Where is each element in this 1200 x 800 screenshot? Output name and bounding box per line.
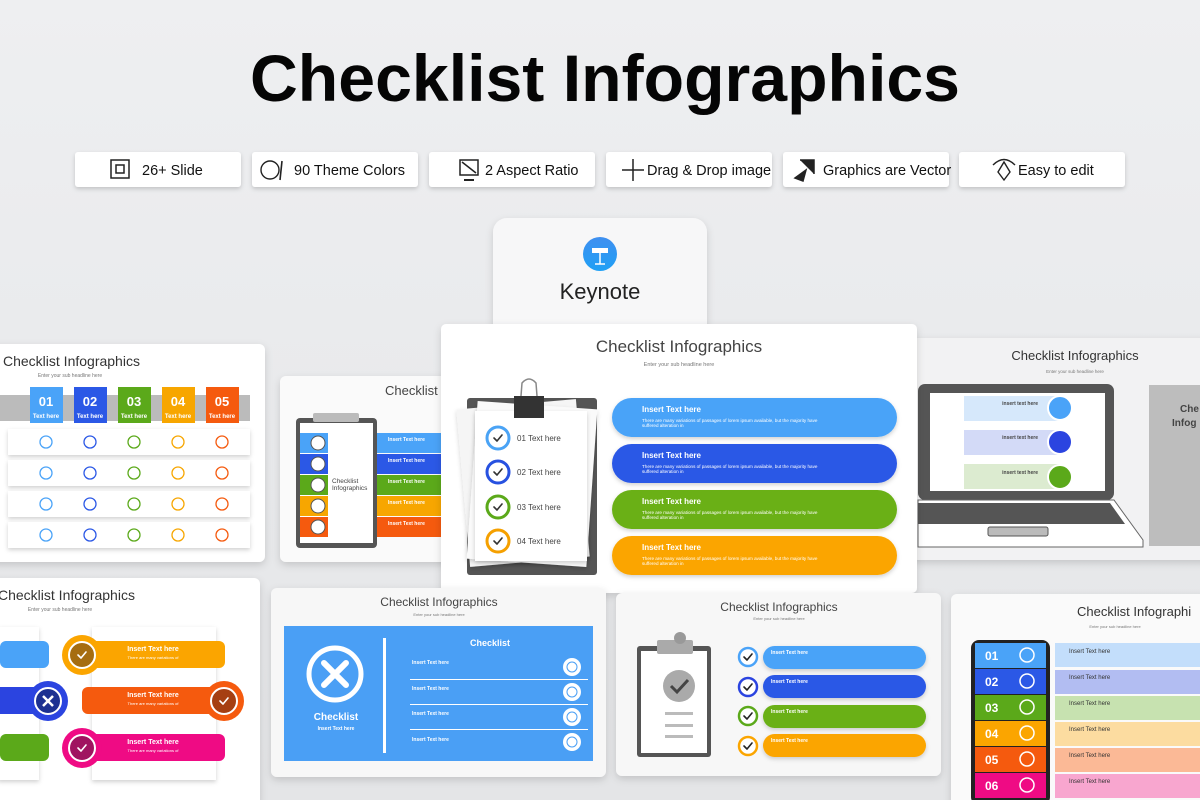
slide: table checklist (top left): Text here bbox=[77, 414, 104, 420]
slide: center main: Insert Text here bbox=[642, 543, 702, 552]
slide: clipboard rows (second): Infographics bbox=[332, 485, 368, 492]
slide: center main bbox=[441, 324, 917, 593]
slide: blue X panel (bottom 2): Checklist bbox=[314, 712, 359, 723]
slide: table checklist (top left): 05 bbox=[215, 394, 229, 409]
slide: center main: Insert Text here bbox=[642, 405, 702, 414]
slide: clipboard rows (second): Checklist I bbox=[385, 383, 445, 398]
slide: ribbons (bottom left): There are many variations of bbox=[128, 655, 179, 660]
slide: phone list (bottom right): 03 bbox=[985, 701, 999, 715]
slide: clipboard pills (bottom 3): Checklist Infographics bbox=[720, 600, 838, 614]
title: Checklist Infographics bbox=[250, 41, 960, 115]
slide: blue X panel (bottom 2): Insert Text here bbox=[412, 686, 449, 692]
slide: phone list (bottom right): Insert Text here bbox=[1069, 675, 1111, 681]
slide: ribbons (bottom left): Insert Text here bbox=[127, 646, 179, 653]
slide: table checklist (top left): 03 bbox=[127, 394, 141, 409]
pill: 2 Aspect Ratio: 2 Aspect Ratio bbox=[485, 163, 578, 179]
slide: ribbons (bottom left): There are many variations of bbox=[128, 748, 179, 753]
slide: ribbons (bottom left): There are many variations of bbox=[128, 701, 179, 706]
slide: laptop (top right): Che bbox=[1180, 404, 1199, 415]
pill: Graphics are Vector: Graphics are Vector bbox=[823, 163, 951, 179]
slide: table checklist (top left): Text here bbox=[165, 414, 192, 420]
slide: table checklist (top left): Checklist Infographics bbox=[3, 353, 140, 369]
pill: Graphics are Vector bbox=[783, 152, 951, 187]
slide: clipboard rows (second): Insert Text here bbox=[388, 521, 425, 527]
clipboard: 01 Text here bbox=[517, 434, 561, 443]
slide: table checklist (top left): Text here bbox=[121, 414, 148, 420]
slide: center main: There are many variations of passages of lorem ipsum available, but the majority have bbox=[642, 556, 818, 561]
slide: clipboard pills (bottom 3): Insert Text here bbox=[771, 709, 808, 715]
slide: center main: Insert Text here bbox=[642, 497, 702, 506]
pill: 26+ Slide: 26+ Slide bbox=[142, 163, 203, 179]
slide: clipboard rows (second) bbox=[280, 376, 460, 562]
slide: phone list (bottom right): 02 bbox=[985, 675, 999, 689]
slide: blue X panel (bottom 2) bbox=[271, 588, 606, 777]
slide: phone list (bottom right): Enter your sub headline here bbox=[1089, 624, 1141, 629]
clipboard: 04 Text here bbox=[517, 537, 561, 546]
slide: clipboard pills (bottom 3): Insert Text here bbox=[771, 738, 808, 744]
slide: table checklist (top left): 01 bbox=[39, 394, 53, 409]
slide: center main: Enter your sub headline here bbox=[644, 362, 714, 368]
slide: laptop (top right): insert text here bbox=[1002, 401, 1038, 407]
slide: laptop (top right): Infog bbox=[1172, 418, 1196, 429]
slide: laptop (top right): Checklist Infographics bbox=[1011, 348, 1139, 363]
slide: blue X panel (bottom 2): Checklist bbox=[470, 638, 510, 648]
slide: phone list (bottom right): Insert Text here bbox=[1069, 753, 1111, 759]
slide: table checklist (top left): Enter your sub headline here bbox=[38, 373, 102, 379]
slide: laptop (top right): insert text here bbox=[1002, 470, 1038, 476]
slide: phone list (bottom right): Insert Text here bbox=[1069, 727, 1111, 733]
slide: phone list (bottom right) bbox=[951, 594, 1200, 800]
slide: ribbons (bottom left): Insert Text here bbox=[127, 739, 179, 746]
pill bars bbox=[612, 398, 897, 575]
pill: 2 Aspect Ratio bbox=[429, 152, 595, 187]
slide: ribbons (bottom left): Checklist Infographics bbox=[0, 587, 135, 603]
clipboard bbox=[456, 379, 597, 575]
icon: keynote bbox=[583, 237, 617, 271]
slide: clipboard rows (second): Insert Text here bbox=[388, 437, 425, 443]
slide: blue X panel (bottom 2): Insert Text here bbox=[412, 711, 449, 717]
keynote card: Keynote bbox=[560, 279, 640, 304]
slide: table checklist (top left): Text here bbox=[33, 414, 60, 420]
slide: center main: suffered alteration in bbox=[642, 469, 684, 474]
slide: phone list (bottom right): 04 bbox=[985, 727, 999, 741]
clipboard: 02 Text here bbox=[517, 468, 561, 477]
slide: laptop (top right): Enter your sub headline here bbox=[1046, 369, 1104, 374]
clipboard: 03 Text here bbox=[517, 503, 561, 512]
slide: table checklist (top left): 02 bbox=[83, 394, 97, 409]
pill: Drag & Drop image: Drag & Drop image bbox=[647, 163, 771, 179]
slide: center main: There are many variations of passages of lorem ipsum available, but the majority have bbox=[642, 464, 818, 469]
slide: phone list (bottom right): 05 bbox=[985, 753, 999, 767]
pill: Drag & Drop image bbox=[606, 152, 772, 187]
slide: clipboard pills (bottom 3) bbox=[616, 593, 941, 776]
slide: ribbons (bottom left): Enter your sub headline here bbox=[28, 607, 92, 613]
slide: center main: suffered alteration in bbox=[642, 561, 684, 566]
slide: center main: suffered alteration in bbox=[642, 423, 684, 428]
slide: blue X panel (bottom 2): Checklist Infographics bbox=[380, 595, 498, 609]
slide: clipboard pills (bottom 3): Insert Text here bbox=[771, 679, 808, 685]
pill: 90 Theme Colors: 90 Theme Colors bbox=[294, 163, 405, 179]
slide: center main: There are many variations of passages of lorem ipsum available, but the majority have bbox=[642, 418, 818, 423]
slide: blue X panel (bottom 2): Insert Text here bbox=[318, 726, 355, 732]
slide: clipboard rows (second): Insert Text here bbox=[388, 500, 425, 506]
slide: ribbons (bottom left): Insert Text here bbox=[127, 692, 179, 699]
pill: Easy to edit bbox=[959, 152, 1125, 187]
slide: blue X panel (bottom 2): Insert Text here bbox=[412, 737, 449, 743]
slide: clipboard rows (second): Insert Text here bbox=[388, 479, 425, 485]
slide: laptop (top right) bbox=[912, 338, 1200, 560]
slide: phone list (bottom right): 06 bbox=[985, 779, 999, 793]
slide: center main: There are many variations of passages of lorem ipsum available, but the majority have bbox=[642, 510, 818, 515]
slide: laptop (top right): insert text here bbox=[1002, 435, 1038, 441]
slide: phone list (bottom right): Insert Text here bbox=[1069, 701, 1111, 707]
slide: phone list (bottom right): Insert Text here bbox=[1069, 779, 1111, 785]
slide: clipboard rows (second): Checklist bbox=[332, 478, 359, 485]
slide: phone list (bottom right): 01 bbox=[985, 649, 999, 663]
pill: 90 Theme Colors bbox=[252, 152, 418, 187]
slide: phone list (bottom right): Insert Text here bbox=[1069, 649, 1111, 655]
slide: center main: suffered alteration in bbox=[642, 515, 684, 520]
slide: clipboard pills (bottom 3): Enter your sub headline here bbox=[753, 616, 805, 621]
slide: table checklist (top left): Text here bbox=[209, 414, 236, 420]
slide: clipboard pills (bottom 3): Insert Text here bbox=[771, 650, 808, 656]
slide: blue X panel (bottom 2): Enter your sub headline here bbox=[413, 612, 465, 617]
center slide heading: Checklist Infographics bbox=[596, 337, 762, 356]
pill: 26+ Slide bbox=[75, 152, 241, 187]
slide: blue X panel (bottom 2): Insert Text here bbox=[412, 660, 449, 666]
keynote card bbox=[493, 218, 707, 348]
feature pills bbox=[75, 152, 1125, 187]
pill: Easy to edit: Easy to edit bbox=[1018, 163, 1094, 179]
slide: clipboard rows (second): Insert Text here bbox=[388, 458, 425, 464]
slide: ribbons (bottom left) bbox=[0, 578, 260, 800]
slide: center main: Insert Text here bbox=[642, 451, 702, 460]
slide: phone list (bottom right): Checklist Infographi bbox=[1077, 604, 1191, 619]
slide: table checklist (top left) bbox=[0, 344, 265, 562]
slide: table checklist (top left): 04 bbox=[171, 394, 186, 409]
